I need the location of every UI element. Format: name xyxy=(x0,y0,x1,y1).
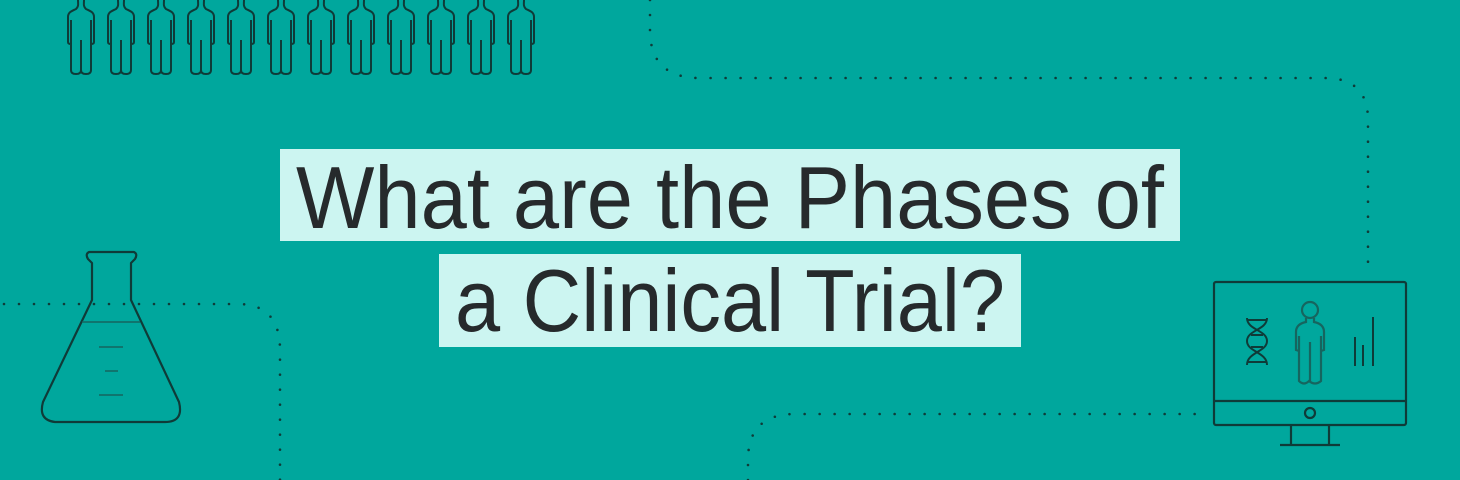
dotted path: top right xyxy=(650,0,1368,275)
icon: computer monitor xyxy=(1214,282,1406,445)
title box line 1: What are the Phases of xyxy=(296,148,1165,247)
icon: flask xyxy=(42,252,180,422)
dotted path: left xyxy=(4,304,280,480)
icon: bar chart xyxy=(1355,317,1373,366)
icon: row of people xyxy=(68,0,534,74)
dotted path: bottom xyxy=(748,414,1205,480)
icon: person on screen xyxy=(1296,302,1324,384)
title box line 2: a Clinical Trial? xyxy=(455,251,1005,350)
icon: dna xyxy=(1247,318,1267,365)
